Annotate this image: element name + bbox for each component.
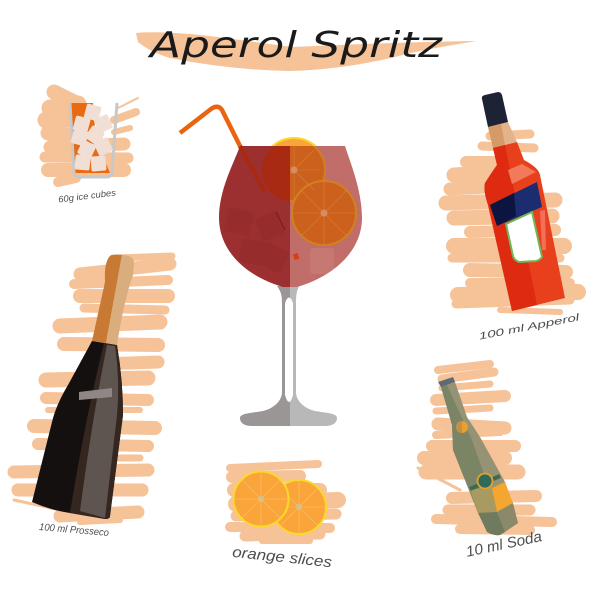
label: ice: 60g ice cubes xyxy=(58,187,117,204)
label: prosecco: 100 ml Prosseco xyxy=(39,522,110,539)
label: aperol: 100 ml Apperol xyxy=(478,312,581,343)
brush stroke: ice xyxy=(45,92,138,182)
bottle xyxy=(482,92,565,311)
orange rim xyxy=(271,137,316,146)
panel: orange slices xyxy=(230,464,338,571)
stem and base xyxy=(240,286,337,426)
label: slices: orange slices xyxy=(231,544,333,571)
brush stroke: slices xyxy=(230,464,338,541)
panel: prosecco bottle xyxy=(14,255,172,539)
title block xyxy=(136,25,477,71)
panel: wine glass xyxy=(180,107,380,426)
panel: aperol bottle xyxy=(446,92,581,343)
label: soda: 10 ml Soda xyxy=(464,528,543,561)
straw outside xyxy=(180,107,240,146)
brush stroke: aperol xyxy=(446,134,578,312)
brush stroke: soda xyxy=(418,364,552,530)
slice: rear xyxy=(272,480,326,534)
title: Aperol Spritz xyxy=(147,25,443,66)
panel: ice cubes xyxy=(45,92,138,204)
fruit bit xyxy=(293,253,299,260)
straw inside xyxy=(240,146,265,192)
brush stroke: prosecco xyxy=(14,256,172,522)
bottle xyxy=(438,377,518,535)
glass bowl xyxy=(219,145,362,287)
bottle xyxy=(32,255,134,519)
glass with ice xyxy=(70,103,117,177)
panel: soda bottle xyxy=(418,364,552,561)
brush stroke: title xyxy=(136,32,477,71)
slice: front xyxy=(234,472,288,526)
